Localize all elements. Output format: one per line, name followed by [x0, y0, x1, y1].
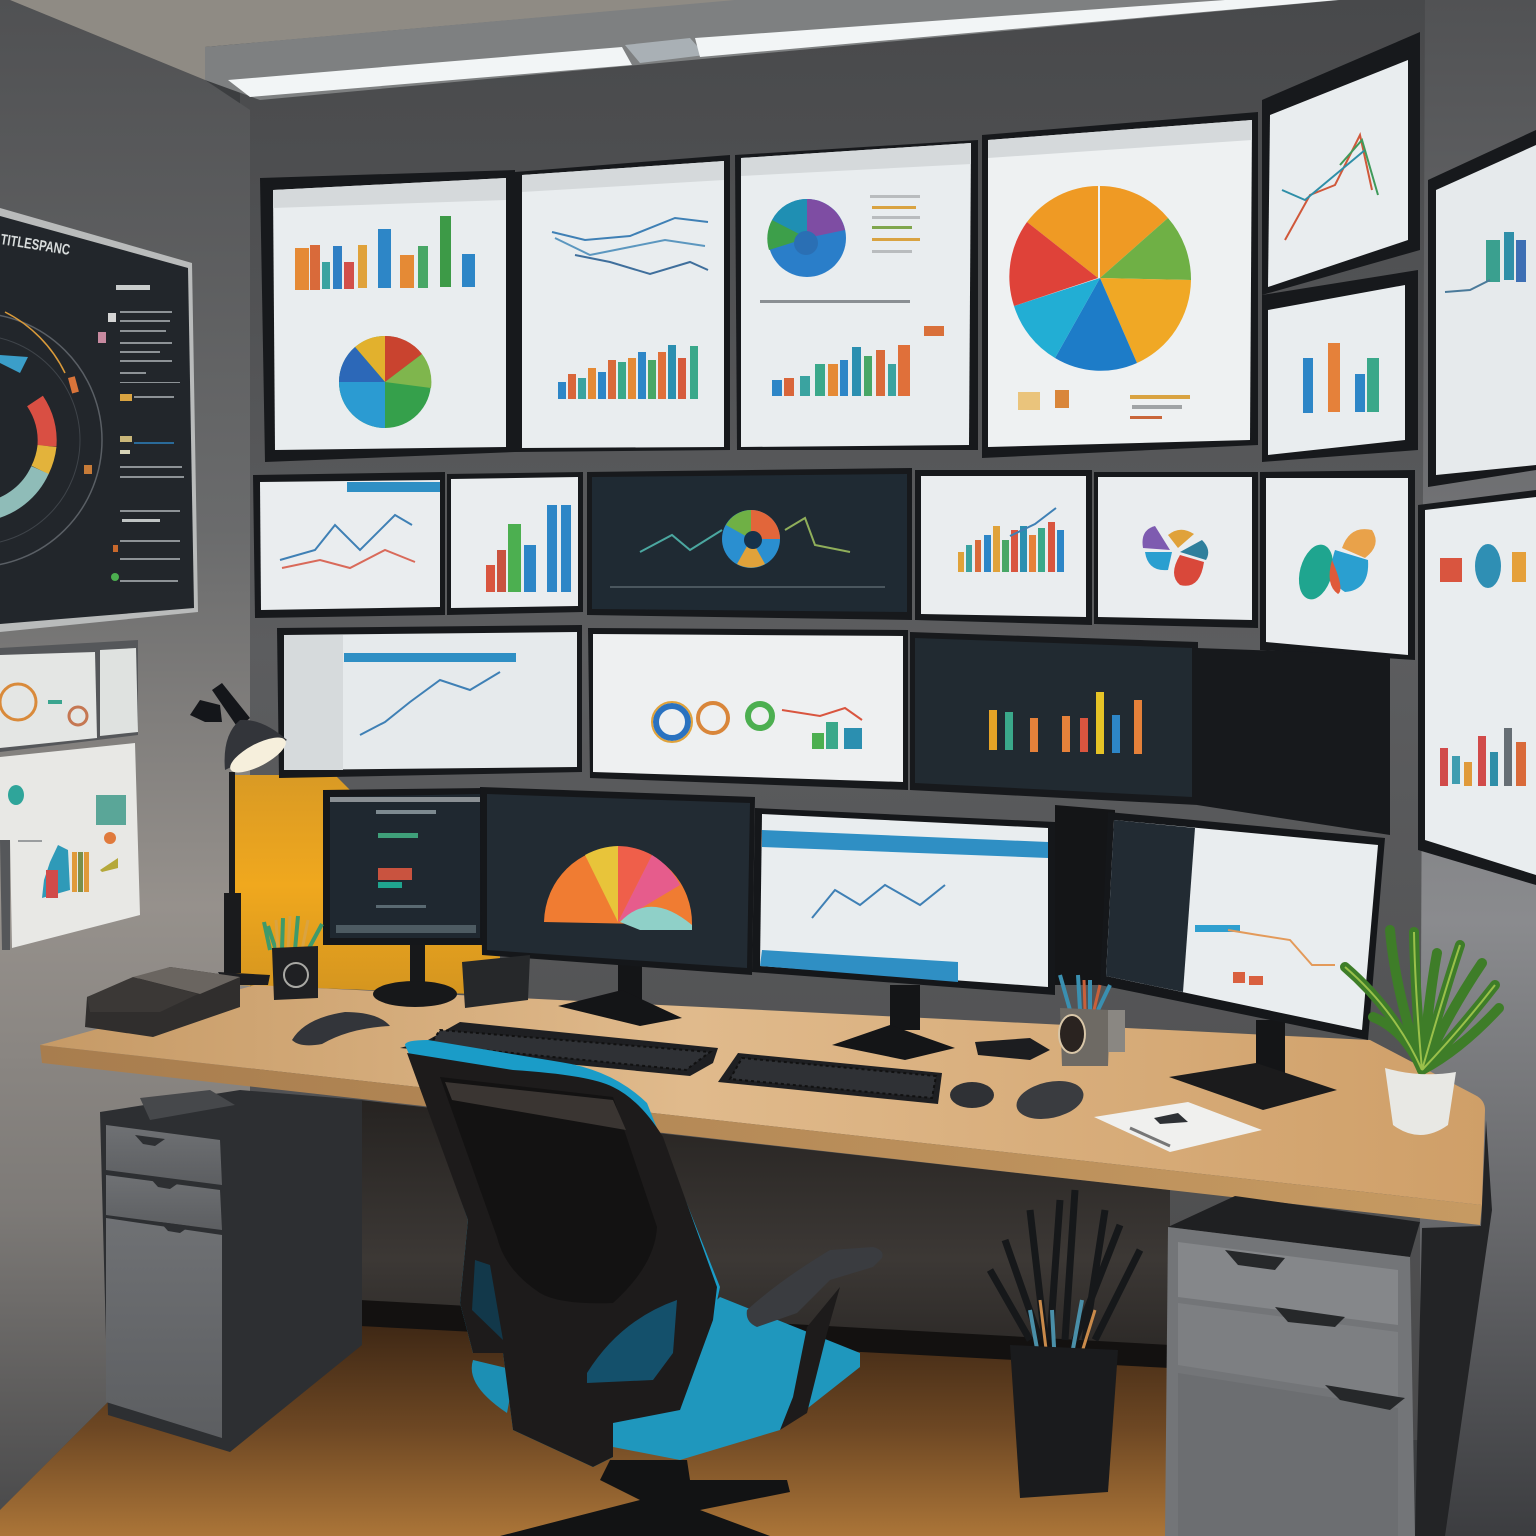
yellow lit wall [235, 775, 500, 995]
mice [950, 1075, 1087, 1125]
screen: fan chart [1094, 472, 1258, 628]
under-desk wall and baseboard [360, 1100, 1170, 1368]
screen: dark with wheel [587, 468, 912, 620]
ceiling [10, 0, 1340, 100]
office chair [405, 1040, 883, 1536]
notebook [1094, 1102, 1262, 1152]
screen: dense bars [915, 470, 1092, 625]
screen: dark bars [910, 632, 1198, 805]
screen: angled blobs [1260, 470, 1415, 660]
small speaker box [462, 955, 530, 1008]
screen: right wall upper [1428, 130, 1536, 487]
screen: large pie [982, 112, 1258, 458]
screen: circle charts [588, 628, 908, 790]
chair back [405, 1040, 720, 1467]
pen holder right [1059, 975, 1125, 1066]
seat left edge [472, 1360, 515, 1413]
screen: blank black [1197, 648, 1390, 835]
large pie chart [1009, 186, 1191, 371]
floor [0, 1320, 1180, 1536]
screen: bars and pie [260, 170, 515, 462]
back wall [240, 0, 1440, 1440]
monitor: orange line chart [1100, 812, 1385, 1110]
panel: small pinned sheets [0, 640, 140, 950]
donut chart [0, 312, 102, 567]
right wall [1420, 0, 1536, 1536]
monitor support behind [1055, 805, 1115, 985]
mouse left [292, 1012, 390, 1045]
right drawer cabinet [1165, 1196, 1420, 1536]
desk [40, 985, 1485, 1225]
chair base [500, 1460, 790, 1536]
monitor wall row two [253, 468, 1415, 660]
left wall [0, 0, 250, 1510]
monitor wall row three [277, 625, 1390, 835]
chair arm [747, 1247, 883, 1430]
screen: wide line chart [277, 625, 582, 778]
screen: tall bars [447, 472, 583, 615]
mesh back [440, 1077, 657, 1303]
left drawer cabinet [100, 1090, 362, 1452]
lumbar mesh [587, 1300, 677, 1383]
screen: right wall lower [1418, 490, 1536, 885]
panel: dark circular poster [0, 208, 198, 632]
screen: angled line chart [1262, 32, 1420, 295]
monitor wall row one [260, 32, 1536, 885]
plant [1345, 930, 1499, 1135]
monitor: left dark code [323, 788, 485, 1007]
poster title: TITLESPANC [0, 231, 71, 259]
pie chart [767, 199, 846, 277]
keyboard left [400, 1022, 718, 1076]
chair seat [613, 1297, 860, 1460]
desk lamp [190, 683, 291, 985]
screen: line chart and bars [515, 155, 730, 452]
poster text column [111, 285, 184, 582]
screen: angled bars [1262, 270, 1418, 462]
scanner book [85, 967, 240, 1037]
monitor: gauge [480, 787, 755, 1026]
light fixture [205, 0, 1340, 100]
screen: line chart [253, 472, 445, 618]
keyboard right [718, 1053, 942, 1104]
pen cup [264, 916, 322, 1000]
black gadget on desk [975, 1038, 1050, 1060]
pen bin under desk [990, 1190, 1140, 1498]
screen: donut and bars [735, 140, 978, 450]
dark strip beside desk [1415, 1120, 1492, 1536]
monitor: white line chart [752, 808, 1055, 1060]
pie chart [339, 336, 431, 428]
